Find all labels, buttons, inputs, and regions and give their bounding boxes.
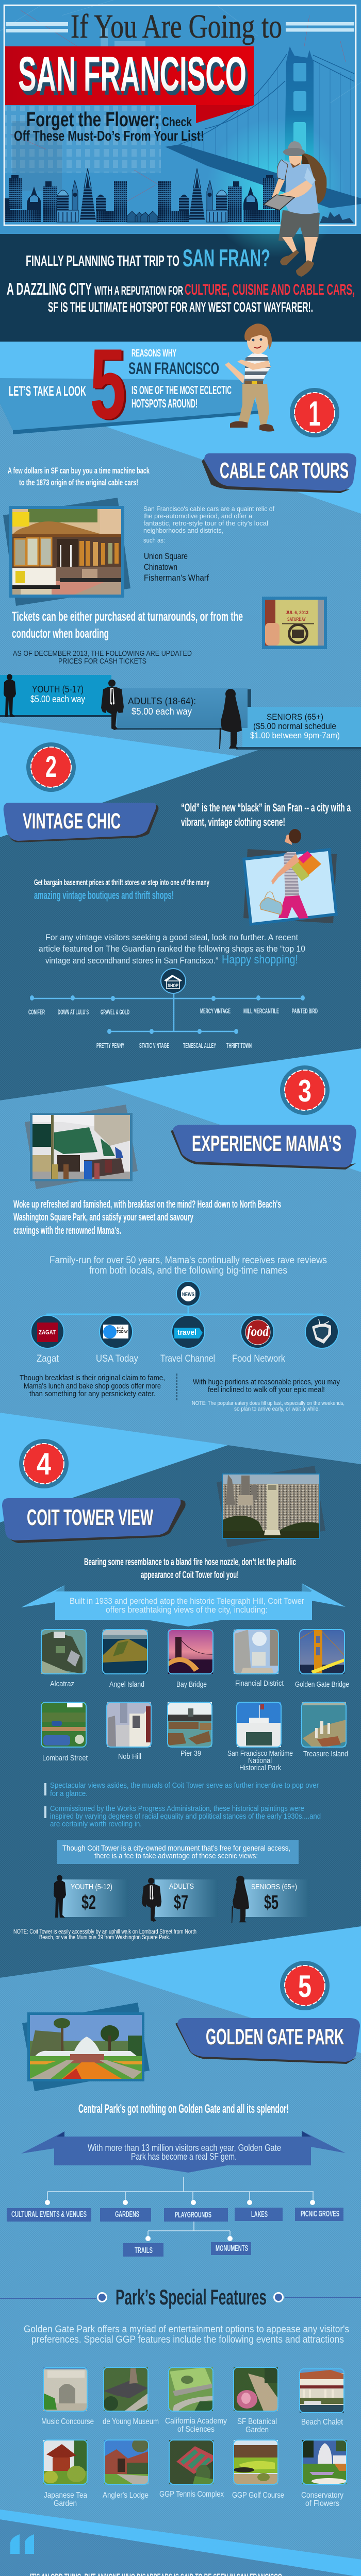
text: lunch: than something for any persnickety eater. xyxy=(29,1389,155,1398)
panel: adult price: ADULTS xyxy=(169,1882,194,1891)
label: sf botanical garden: SF Botanical xyxy=(237,2417,277,2426)
text: murals xyxy=(44,1781,319,1798)
text: price note: AS OF DECEMBER 2013, THE FOLLOWING ARE UPDATED xyxy=(13,649,192,658)
label: maritime park: National xyxy=(248,1756,272,1765)
panel: hero header xyxy=(0,0,361,342)
tile: tennis complex xyxy=(169,2440,214,2484)
tile: california academy xyxy=(169,2367,213,2411)
text: cable car description xyxy=(143,505,274,544)
icon: shop xyxy=(161,969,186,993)
text: guardian article: Happy shopping! xyxy=(222,953,298,966)
panel: seniors fare xyxy=(236,707,361,750)
list: neighborhoods: Fisherman's Wharf xyxy=(144,573,209,583)
ribbon: built in 1933: Built in 1933 and perched atop the historic Telegraph Hill, Coit Tower xyxy=(70,1596,304,1606)
label: beach chalet: Beach Chalet xyxy=(301,2418,343,2427)
intro text: WITH A REPUTATION FOR xyxy=(94,284,183,298)
badge: number 3 xyxy=(280,1065,330,1115)
icon: pointing boy xyxy=(225,324,274,432)
subtitle: Check xyxy=(162,115,192,129)
label: california academy xyxy=(165,2417,227,2434)
text: vintage intro xyxy=(181,801,351,828)
text: lunch: Though breakfast is their original claim to fame, xyxy=(20,1374,165,1382)
label: alcatraz: Alcatraz xyxy=(50,1680,74,1688)
text: tickets: conductor when boarding xyxy=(12,626,109,641)
text: bargains xyxy=(34,878,209,902)
icon: senior silhouette xyxy=(219,689,242,749)
intro text: A DAZZLING CITY xyxy=(7,279,92,298)
chart: shop tree: DOWN AT LULU’S xyxy=(58,1008,89,1016)
chart: media tree: Zagat xyxy=(37,1353,59,1364)
chart: park features tree: MONUMENTS xyxy=(216,2244,248,2253)
panel: youth fare xyxy=(0,675,111,717)
text: price note xyxy=(13,649,192,666)
tile: lombard street xyxy=(41,1702,86,1747)
panel: youth fare: $5.00 each way xyxy=(30,694,85,704)
icon: zagat: ZAGAT xyxy=(39,1329,56,1336)
chart: park features tree: GARDENS xyxy=(115,2210,139,2219)
ribbon: built in 1933: offers breathtaking views of the city, including: xyxy=(106,1605,268,1615)
panel: seniors fare: $1.00 between 9pm-7am) xyxy=(250,731,340,740)
subtitle: Off These Must-Do’s From Your List! xyxy=(14,128,204,144)
city skyline xyxy=(5,168,354,223)
label: de young museum: de Young Museum xyxy=(103,2417,159,2426)
tile: maritime park xyxy=(237,1702,281,1747)
photo: mama's xyxy=(25,1105,138,1189)
tile: bay bridge xyxy=(168,1630,213,1674)
intro reasons text: REASONS WHY xyxy=(132,348,176,359)
label: maritime park: San Francisco Maritime xyxy=(227,1749,293,1758)
panel: adult price: $7 xyxy=(174,1892,188,1913)
photo: ticket: SATURDAY xyxy=(287,617,306,622)
text: family-run: Family-run for over 50 years, Mama's continually receives rave reviews xyxy=(50,1255,327,1266)
icon: adult silhouette xyxy=(101,680,124,730)
callout: fee: Though Coit Tower is a city-owned monument that’s free for general access, xyxy=(62,1844,290,1853)
tile: japanese tea garden xyxy=(43,2440,87,2484)
label: japanese tea garden: Garden xyxy=(54,2499,77,2508)
ribbon: let's take a look xyxy=(0,378,260,434)
chart: shop tree: TEMESCAL ALLEY xyxy=(183,1041,216,1049)
chart: shop tree: MERCY VINTAGE xyxy=(200,1007,231,1015)
photo: conservatory of flowers xyxy=(22,2003,150,2091)
panel: youth price: YOUTH (5-12) xyxy=(71,1883,112,1891)
tile: golden gate bridge xyxy=(300,1630,344,1674)
icon: food network xyxy=(241,1315,274,1348)
intro headline: FINALLY PLANNING THAT TRIP TO xyxy=(26,253,179,269)
label: angler's lodge: Angler's Lodge xyxy=(103,2491,149,2500)
ribbon: 13 million visitors: With more than 13 million visitors each year, Golden Gate xyxy=(88,2143,281,2153)
chart: shop tree: STATIC VINTAGE xyxy=(139,1041,169,1049)
intro reasons text: IS ONE OF THE MOST ECLECTIC xyxy=(132,383,232,397)
list: neighborhoods xyxy=(144,551,209,583)
text: vintage intro: vibrant, vintage clothing scene! xyxy=(181,816,285,828)
text: cable car description: San Francisco's cable cars are a quaint relic of xyxy=(143,505,274,513)
chart: park features tree xyxy=(7,2177,343,2257)
list: neighborhoods: Union Square xyxy=(144,551,188,561)
text: portions: With huge portions at reasonable prices, you may xyxy=(193,1378,340,1386)
badge: number 4: 4 xyxy=(37,1447,52,1481)
icon: travel channel xyxy=(172,1315,205,1348)
heading: park's special features: Park’s Special Features xyxy=(116,2285,267,2309)
badge: number 3: 3 xyxy=(298,1074,311,1108)
label: tennis complex: GGP Tennis Complex xyxy=(159,2490,224,2499)
icon: youth silhouette small xyxy=(54,1875,66,1918)
icon: opening quote mark xyxy=(10,2534,34,2554)
text: portions xyxy=(192,1378,344,1412)
text: guardian article: article featured on The Guardian ranked the following shops as the “top 10 xyxy=(39,944,305,954)
text: works progress: are certainly worth reveling in. xyxy=(50,1820,142,1828)
text: fire hose xyxy=(84,1557,296,1581)
intro reasons text: LET’S TAKE A LOOK xyxy=(9,383,86,399)
badge: number 1: 1 xyxy=(308,394,321,433)
list: neighborhoods: Chinatown xyxy=(144,562,177,572)
tile: music concourse xyxy=(43,2367,87,2411)
panel: adult fare: $5.00 each way xyxy=(132,706,192,717)
chart: media tree xyxy=(31,1281,338,1364)
badge: number 5 xyxy=(280,1961,330,2010)
badge: number 1 xyxy=(290,388,339,437)
tile: conservatory xyxy=(302,2440,347,2484)
text: coit note: Beach, or via the Muni bus 39 from Washington Square Park. xyxy=(39,1935,170,1941)
badge: number 4 xyxy=(19,1439,69,1488)
text: bargains: amazing vintage boutiques and thrift shops! xyxy=(34,889,174,902)
photo: cable car xyxy=(3,498,130,606)
chart: media tree: USA Today xyxy=(96,1353,138,1364)
text: portions: feel inclined to walk off your epic meal! xyxy=(208,1385,325,1394)
banner: coit tower view xyxy=(2,1498,186,1543)
text: coit note: NOTE: Coit Tower is easily accessibly by an uphill walk on Lombard Street from North xyxy=(13,1929,196,1935)
intro reasons text: HOTSPOTS AROUND! xyxy=(132,397,198,410)
big number five: 5 xyxy=(90,328,126,440)
icon: traveller with tablet xyxy=(264,141,326,277)
label: maritime park xyxy=(227,1749,293,1772)
label: california academy: of Sciences xyxy=(177,2425,215,2434)
panel: adult fare xyxy=(117,688,251,730)
frame xyxy=(4,5,356,225)
label: maritime park: Historical Park xyxy=(239,1764,281,1772)
text: bargains: Get bargain basement prices at thrift stores or step into one of the many xyxy=(34,878,209,887)
panel: adult fare: ADULTS (18-64): xyxy=(128,696,196,706)
tile: sf botanical garden xyxy=(234,2367,278,2411)
heading: park's special features xyxy=(0,2285,361,2309)
icon: adult silhouette small xyxy=(142,1878,161,1922)
tile: angler's lodge xyxy=(104,2438,149,2484)
text: works progress: inspired by varying degrees of racial equality and political stances of the early 1930s....and xyxy=(50,1812,321,1821)
tile: financial district xyxy=(234,1630,278,1674)
icon: woman shopper xyxy=(242,829,338,926)
icon: zagat xyxy=(31,1315,64,1348)
ribbon: 13 million visitors: Park has become a real SF gem. xyxy=(131,2151,237,2162)
tile: angel island xyxy=(103,1630,147,1674)
panel: senior price xyxy=(244,1879,309,1917)
chart: shop tree: THRIFT TOWN xyxy=(226,1041,252,1049)
label: bay bridge: Bay Bridge xyxy=(176,1680,207,1689)
icon: news globe xyxy=(176,1281,200,1306)
text: family-run xyxy=(50,1255,327,1276)
text: fire hose: appearance of Coit Tower fool you! xyxy=(141,1570,239,1581)
tile: golf course xyxy=(234,2440,278,2484)
chart: park features tree: CULTURAL EVENTS & VENUES xyxy=(11,2210,87,2219)
label: conservatory: of Flowers xyxy=(305,2499,339,2508)
icon: usa today: TODAY xyxy=(117,1330,128,1334)
intro reasons text xyxy=(9,348,232,410)
text: family-run: from both locals, and the following big-time names xyxy=(89,1265,287,1276)
label: sf botanical garden: Garden xyxy=(245,2426,269,2434)
text: breakfast xyxy=(13,1199,281,1236)
text: time machine: A few dollars in SF can buy you a time machine back xyxy=(8,466,150,476)
panel: youth fare: YOUTH (5-17) xyxy=(32,684,84,694)
label: golf course: GGP Golf Course xyxy=(232,2491,284,2500)
intro text xyxy=(7,279,355,315)
text: breakfast: Washington Square Park, and satisfy your sweet and savoury xyxy=(13,1212,194,1223)
label: japanese tea garden xyxy=(44,2491,87,2508)
badge: number 2 xyxy=(26,742,76,792)
text: works progress: Commissioned by the Works Progress Administration, these historical paintings were xyxy=(50,1804,304,1813)
badge: number 2: 2 xyxy=(45,750,57,784)
chart: park features tree: TRAILS xyxy=(135,2246,153,2255)
icon: usa today xyxy=(100,1315,133,1348)
chart: shop tree xyxy=(28,969,318,1049)
photo: ticket xyxy=(262,597,327,649)
text: works progress xyxy=(44,1804,321,1828)
ribbon: built in 1933 xyxy=(21,1583,346,1626)
tile: alcatraz xyxy=(41,1630,86,1674)
callout: fee: there is a fee to take advantage of those scenic views: xyxy=(94,1852,258,1860)
label: sf botanical garden xyxy=(237,2417,277,2434)
label: financial district: Financial District xyxy=(235,1679,284,1688)
panel: seniors fare: SENIORS (65+) xyxy=(267,712,323,722)
photo: ticket: JUL 6, 2013 xyxy=(286,610,308,615)
text: breakfast: cravings with the renowned Mama's. xyxy=(13,1225,121,1236)
panel: senior price: SENIORS (65+) xyxy=(251,1883,297,1891)
icon: youth silhouette xyxy=(4,674,16,717)
text: guardian article: vintage and secondhand stores in San Francisco.” xyxy=(45,956,218,965)
intro headline xyxy=(26,244,270,272)
banner: coit tower view: COIT TOWER VIEW xyxy=(27,1505,153,1530)
text: tickets xyxy=(12,609,243,641)
banner: experience mama's xyxy=(171,1125,356,1170)
icon: news globe: NEWS xyxy=(182,1292,194,1298)
tile: de young museum xyxy=(104,2367,148,2411)
banner: vintage chic xyxy=(4,803,158,842)
icon: food network: food xyxy=(247,1324,269,1339)
text: coit note xyxy=(13,1929,196,1941)
intro reasons text: SAN FRANCISCO xyxy=(128,359,219,378)
panel: youth price xyxy=(62,1879,128,1917)
badge: number 5: 5 xyxy=(298,1969,311,2004)
text: portions: so plan to arrive early, or wait a while. xyxy=(234,1406,320,1412)
banner: vintage chic: VINTAGE CHIC xyxy=(23,809,121,834)
panel: youth price: $2 xyxy=(81,1892,96,1913)
label: japanese tea garden: Japanese Tea xyxy=(44,2491,87,2500)
icon: senior silhouette small xyxy=(232,1876,249,1923)
intro headline: SAN FRAN? xyxy=(183,244,270,272)
title line: If You Are Going to xyxy=(71,8,282,45)
icon: golden gate bridge xyxy=(165,46,361,208)
label: nob hill: Nob Hill xyxy=(118,1752,141,1761)
tile: nob hill xyxy=(107,1702,151,1747)
icon: travel channel: travel xyxy=(177,1328,196,1337)
callout: fee xyxy=(57,1840,299,1864)
label: conservatory xyxy=(301,2491,343,2508)
tile: pier 39 xyxy=(168,1702,212,1747)
subtitle xyxy=(14,109,204,144)
text: guardian article xyxy=(39,933,305,966)
label: pier 39: Pier 39 xyxy=(180,1749,201,1758)
text: guardian article: For any vintage visitors seeking a good steal, look no further. A recent xyxy=(45,933,298,942)
text: time machine xyxy=(8,466,150,487)
icon: shop: SHOP xyxy=(168,983,178,988)
text: cable car description: the pre-automotive period, and offer a xyxy=(143,512,253,520)
banner: golden gate park xyxy=(175,2018,360,2064)
label: lombard street: Lombard Street xyxy=(42,1754,88,1762)
chart: shop tree: PAINTED BIRD xyxy=(292,1007,318,1015)
tile: treasure island xyxy=(302,1702,346,1747)
banner: cable car tours xyxy=(202,453,356,493)
chart: media tree: Food Network xyxy=(232,1353,285,1364)
text: murals: Spectacular views asides, the murals of Coit Tower serve as further incentive to pop over xyxy=(50,1781,319,1790)
decorative bars xyxy=(6,22,354,32)
label: music concourse: Music Concourse xyxy=(41,2417,94,2426)
chart: shop tree: GRAVEL & GOLD xyxy=(101,1008,129,1016)
chart: media tree: Travel Channel xyxy=(160,1353,215,1364)
text: murals: for a glance. xyxy=(50,1789,88,1798)
panel: seniors fare: ($5.00 normal schedule xyxy=(253,721,336,731)
chart: park features tree: PLAYGROUNDS xyxy=(175,2211,211,2219)
panel: adult price xyxy=(155,1879,218,1917)
label: angel island: Angel Island xyxy=(109,1680,144,1689)
text: price note: PRICES FOR CASH TICKETS xyxy=(58,657,146,666)
text: cable car description: such as: xyxy=(143,536,165,544)
icon: usa today: USA xyxy=(117,1327,124,1330)
label: conservatory: Conservatory xyxy=(301,2491,343,2500)
text: cable car description: fantastic, retro-style tour of the city's local xyxy=(143,519,268,527)
tile: beach chalet xyxy=(300,2369,344,2413)
text: cable car description: neighborhoods and districts, xyxy=(143,527,223,534)
icon: television xyxy=(305,1315,338,1348)
chart: park features tree: LAKES xyxy=(251,2210,268,2219)
label: treasure island: Treasure Island xyxy=(303,1750,348,1758)
chart: shop tree: MILL MERCANTILE xyxy=(243,1007,279,1015)
subtitle: Forget the Flower; xyxy=(26,109,160,131)
chart: shop tree: CONIFER xyxy=(28,1008,45,1016)
ribbon: 13 million visitors xyxy=(21,2131,346,2173)
text: lunch xyxy=(20,1374,165,1398)
photo: coit tower xyxy=(217,1466,325,1547)
text: time machine: to the 1873 origin of the original cable cars! xyxy=(19,478,138,487)
red banner xyxy=(5,46,254,123)
chart: shop tree: PRETTY PENNY xyxy=(96,1041,124,1049)
text: lunch: Mama's lunch and bake shop goods offer more xyxy=(24,1382,161,1391)
panel: senior price: $5 xyxy=(264,1892,278,1913)
text: entertainment options xyxy=(24,2324,349,2345)
label: california academy: California Academy xyxy=(165,2417,227,2426)
